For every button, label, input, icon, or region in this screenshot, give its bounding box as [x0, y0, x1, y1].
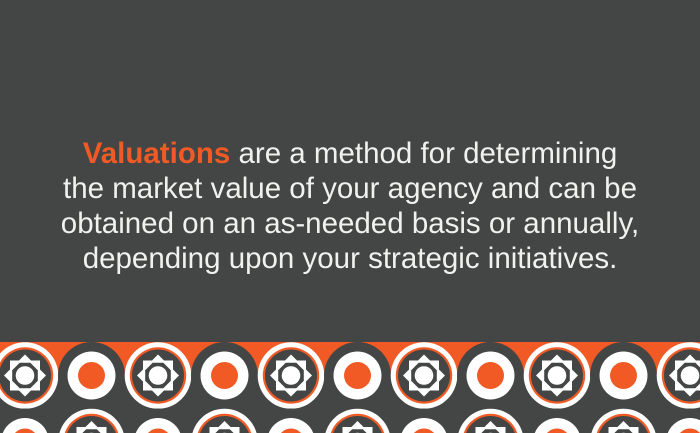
orange stripe: [0, 342, 700, 375]
text block: valuations definition: depending upon your strategic initiatives.: [83, 242, 617, 275]
decorative pattern band: [0, 342, 700, 433]
row 1 of circles: [0, 342, 700, 409]
text block: valuations definition: [61, 136, 639, 275]
text block: valuations definition: the market value of your agency and can be: [63, 172, 637, 205]
row 2 of circles: [0, 408, 700, 433]
text block: valuations definition: Valuations are a method for determining: [83, 136, 617, 170]
text block: valuations definition: obtained on an as-needed basis or annually,: [61, 207, 639, 240]
